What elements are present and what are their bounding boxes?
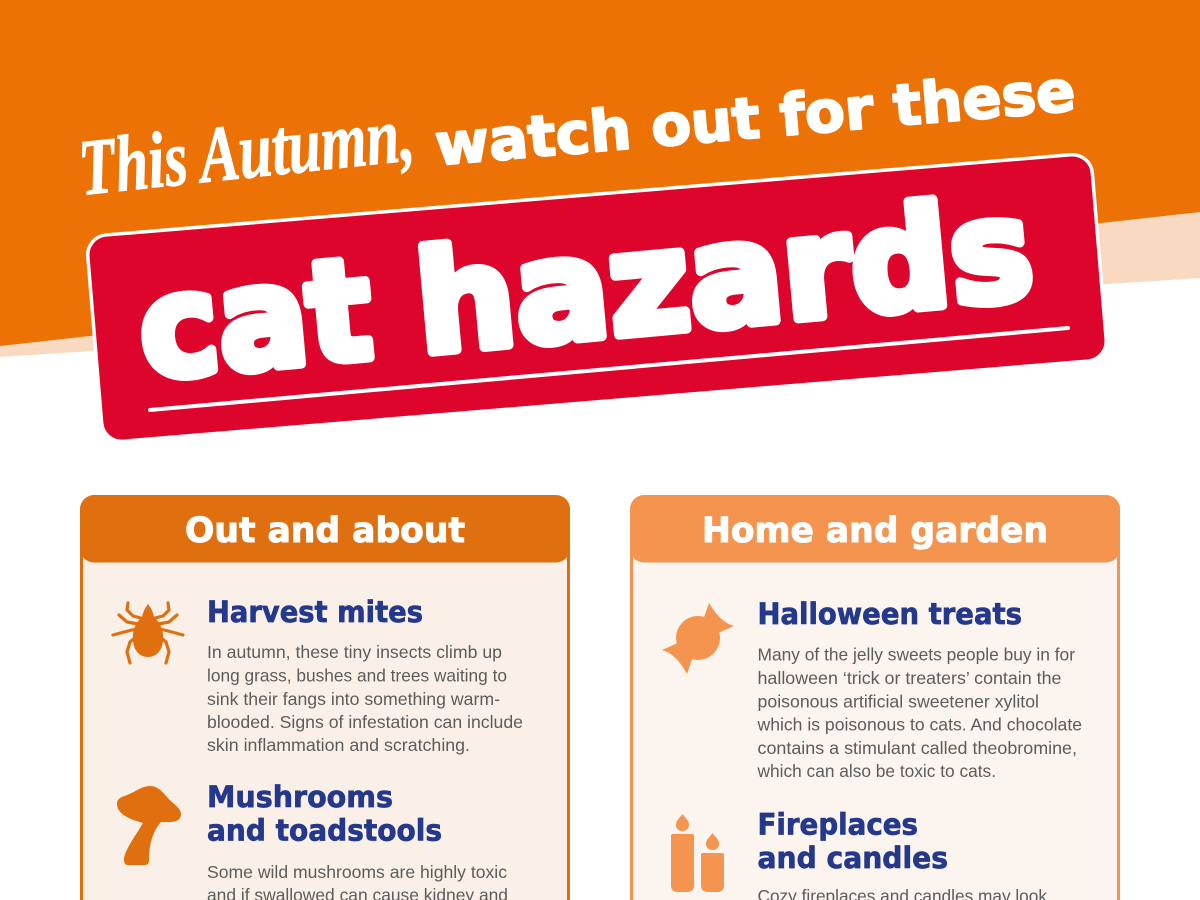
item text: Harvest mites [207, 642, 523, 755]
panel: Home and garden [630, 495, 1120, 900]
icon: candles [671, 814, 724, 892]
header background band [0, 0, 1200, 357]
item text: Harvest mites: In autumn, these tiny insects climb up [207, 642, 502, 662]
item heading: Halloween treats: Halloween treats [758, 597, 1022, 631]
item heading: Fireplaces and candles [758, 808, 948, 875]
item text: Harvest mites: sink their fangs into something warm- [207, 689, 500, 709]
title line: This Autumn, watch out for these: watch out for these [433, 58, 1078, 179]
item text: Halloween treats: which can also be toxic to cats. [757, 761, 996, 781]
icon: mushroom [117, 786, 181, 865]
panel: Out and about [80, 495, 570, 900]
item heading: Mushrooms and toadstools [207, 780, 442, 848]
panel header: Home and garden [630, 495, 1120, 562]
item text: Halloween treats: poisonous artificial sweetener xylitol [758, 692, 1039, 712]
item text: Harvest mites: blooded. Signs of infestation can include [207, 712, 523, 732]
item text: Halloween treats [756, 644, 1082, 781]
item text: Mushrooms and toadstools [207, 862, 508, 900]
panel header: Home and garden: Home and garden [702, 511, 1048, 551]
title banner: cat hazards: hazards [409, 168, 1039, 387]
item text: Halloween treats: halloween ‘trick or treaters’ contain the [758, 668, 1062, 688]
icon: tick [113, 603, 183, 663]
item heading: Fireplaces and candles: Fireplaces [758, 808, 918, 842]
item text: Harvest mites: long grass, bushes and trees waiting to [207, 666, 507, 686]
item text: Halloween treats: which is poisonous to cats. And chocolate [756, 714, 1082, 734]
item heading: Fireplaces and candles: and candles [758, 841, 948, 875]
title line: This Autumn, watch out for these: This Autumn, [75, 90, 418, 213]
item text: Mushrooms and toadstools: Some wild mushrooms are highly toxic [207, 862, 507, 882]
item text: Halloween treats: contains a stimulant called theobromine, [758, 738, 1077, 758]
item heading: Mushrooms and toadstools: Mushrooms [207, 780, 393, 814]
title line: This Autumn, watch out for these [75, 58, 1078, 213]
icon: wrapped sweet [662, 603, 734, 674]
panel header: Out and about [80, 495, 570, 562]
item text: Harvest mites: skin inflammation and scratching. [207, 735, 470, 755]
title banner: cat hazards: cat [132, 229, 378, 412]
item heading: Harvest mites: Harvest mites [207, 595, 423, 629]
item text: Halloween treats: Many of the jelly sweets people buy in for [758, 644, 1075, 664]
panel header: Out and about: Out and about [185, 511, 465, 551]
item heading: Mushrooms and toadstools: and toadstools [207, 814, 442, 848]
title banner: cat hazards [86, 153, 1108, 443]
